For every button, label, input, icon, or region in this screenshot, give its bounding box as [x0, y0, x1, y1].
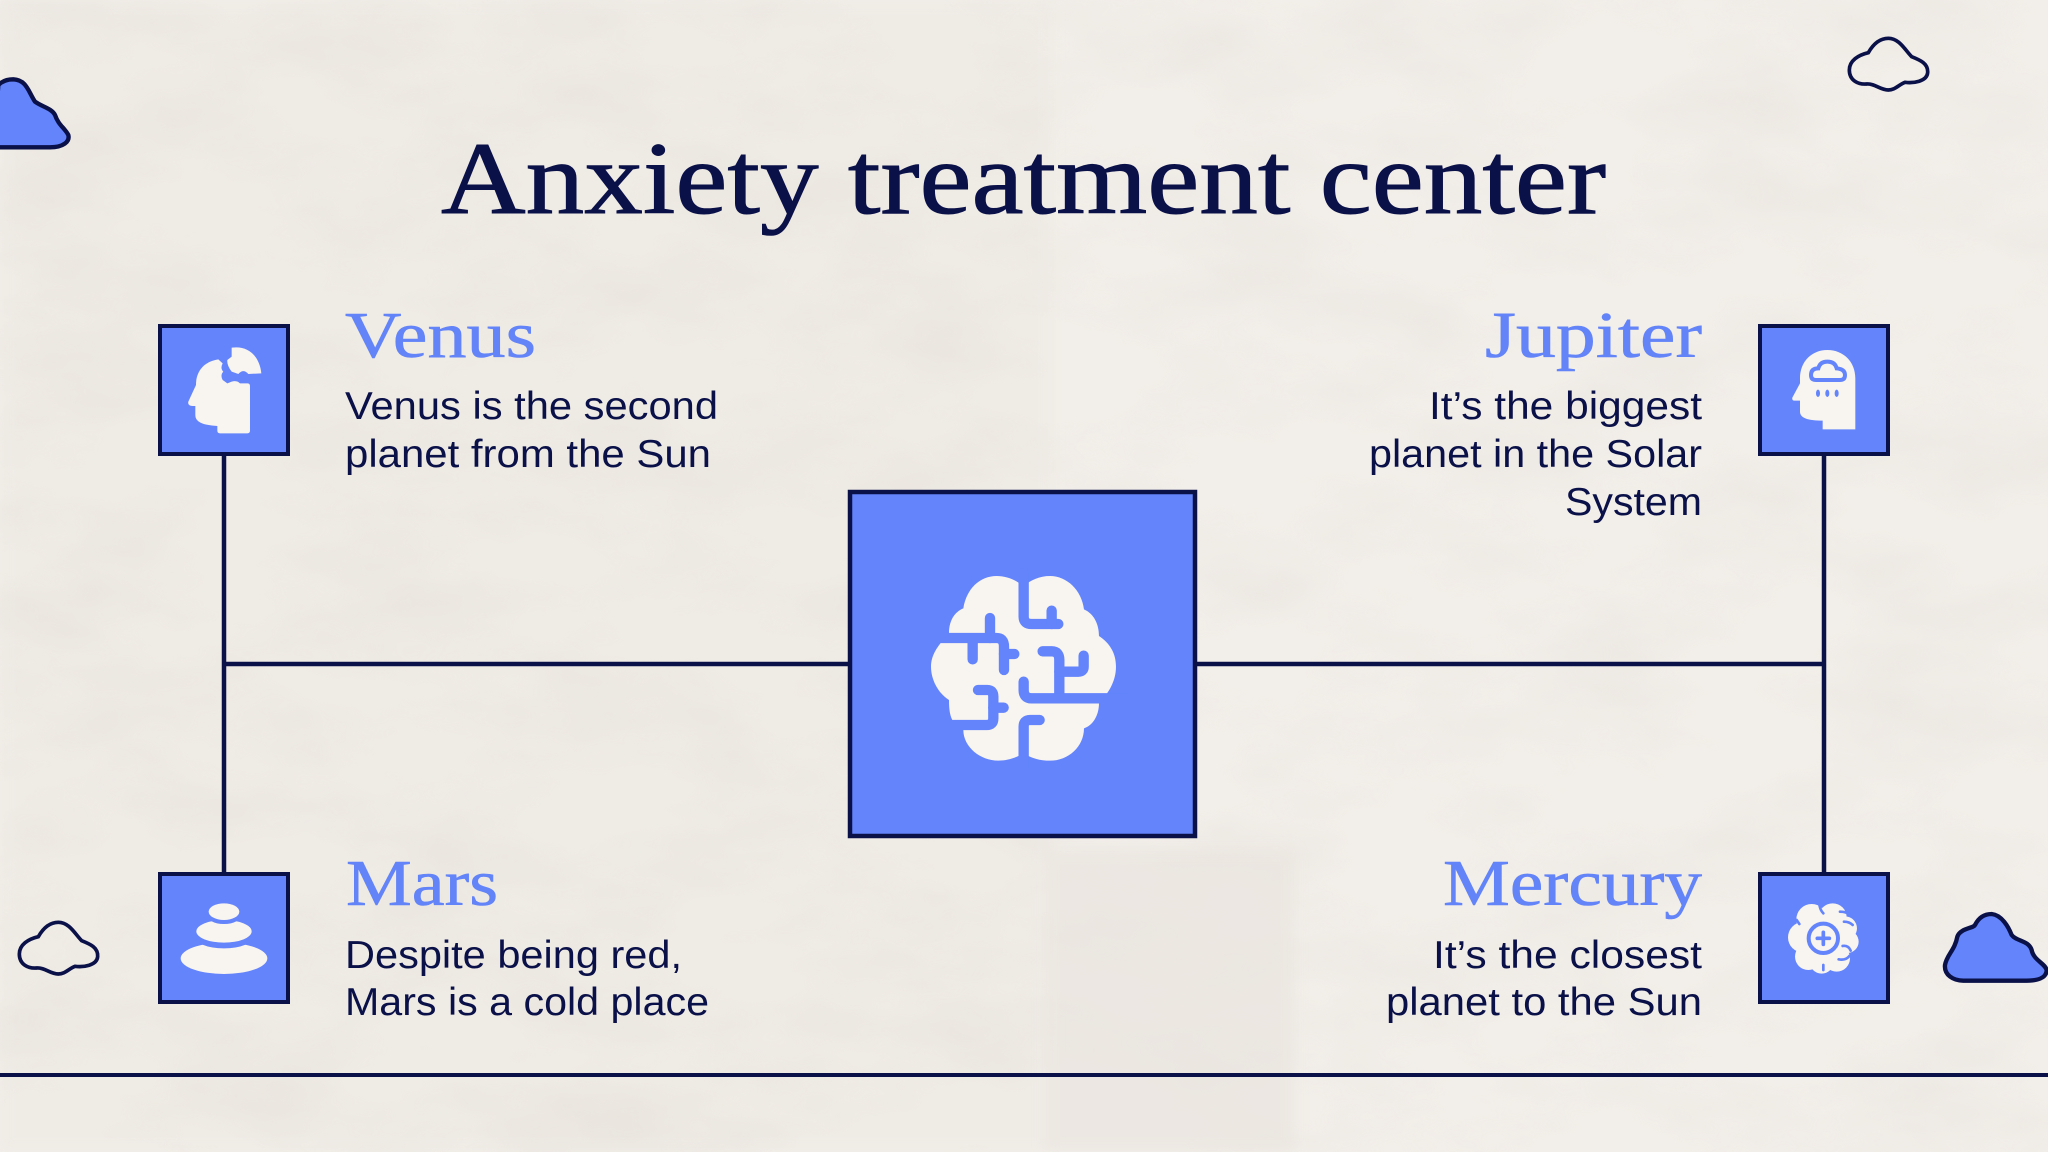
icon box: Mercury [1760, 874, 1888, 1002]
text: Venus description: Venus is the second [345, 385, 718, 428]
text: Jupiter description: It’s the biggest [1429, 385, 1702, 428]
icon: stacked stones [181, 903, 267, 974]
cloud: bottom left outline [19, 922, 98, 974]
text: Mars description: Despite being red, [345, 934, 682, 977]
text: Mars description [345, 934, 709, 1024]
connector lines [224, 454, 1824, 874]
icon: brain [930, 573, 1127, 767]
title: Anxiety treatment center [441, 122, 1606, 236]
text: Mercury description: It’s the closest [1433, 934, 1702, 977]
icon: head with puzzle piece [188, 347, 261, 433]
icon: brain with medical cross [1788, 903, 1859, 974]
heading: Mercury: Mercury [1443, 847, 1702, 920]
cloud: top right outline [1849, 38, 1928, 90]
icon box: Mars [160, 874, 288, 1002]
panel: Jupiter [1369, 299, 1888, 524]
text: Mars description: Mars is a cold place [345, 981, 709, 1024]
text: Jupiter description [1369, 385, 1702, 524]
panel: central brain [850, 492, 1195, 836]
text: Mercury description: planet to the Sun [1386, 981, 1702, 1024]
heading: Jupiter: Jupiter [1485, 299, 1702, 372]
icon box: Venus [160, 326, 288, 454]
heading: Mars: Mars [346, 847, 498, 920]
heading: Venus: Venus [345, 299, 536, 372]
bottom rule [0, 1073, 2048, 1077]
panel: Venus [160, 299, 718, 476]
icon: head with rain cloud [1792, 350, 1855, 429]
cloud: bottom right filled [1945, 914, 2047, 981]
text: Venus description: planet from the Sun [345, 433, 711, 476]
icon box: Jupiter [1760, 326, 1888, 454]
central square [850, 492, 1195, 836]
cloud: top left filled [0, 79, 69, 147]
panel: Mars [160, 847, 709, 1024]
text: Jupiter description: System [1565, 481, 1702, 524]
text: Venus description [345, 385, 718, 476]
text: Mercury description [1386, 934, 1702, 1024]
text: Jupiter description: planet in the Solar [1369, 433, 1702, 476]
panel: Mercury [1386, 847, 1888, 1024]
